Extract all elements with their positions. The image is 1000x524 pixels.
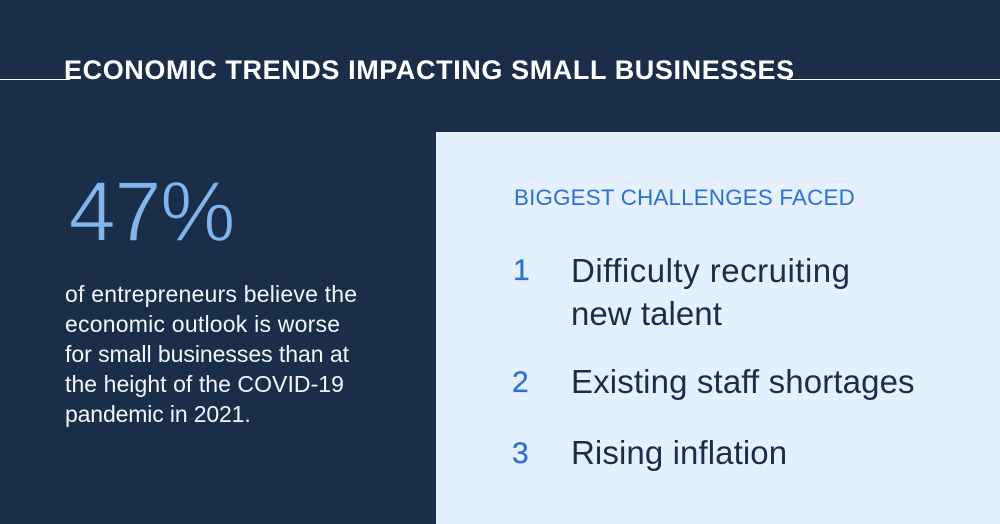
number 2: 2 — [512, 366, 529, 399]
stat description: for small businesses than at — [65, 341, 349, 367]
challenge 3: Rising inflation — [571, 434, 787, 471]
challenge 1: Difficulty recruiting — [571, 252, 850, 289]
challenge 1: new talent — [571, 295, 722, 332]
stat description — [65, 281, 357, 427]
stat description: economic outlook is worse — [65, 311, 340, 337]
title rule left — [0, 79, 70, 80]
number 1: 1 — [513, 254, 530, 287]
number 3: 3 — [512, 437, 529, 470]
stat description: of entrepreneurs believe the — [65, 281, 357, 307]
challenge 2: Existing staff shortages — [571, 363, 915, 400]
stat description: the height of the COVID-19 — [65, 371, 344, 397]
big stat: 47% — [68, 164, 234, 260]
panel heading: BIGGEST CHALLENGES FACED — [514, 185, 855, 210]
title: ECONOMIC TRENDS IMPACTING SMALL BUSINESSES — [64, 55, 795, 85]
panel: challenges — [436, 132, 1000, 524]
stat description: pandemic in 2021. — [65, 401, 251, 427]
challenge 1 — [571, 252, 850, 332]
title rule right — [787, 79, 1000, 80]
